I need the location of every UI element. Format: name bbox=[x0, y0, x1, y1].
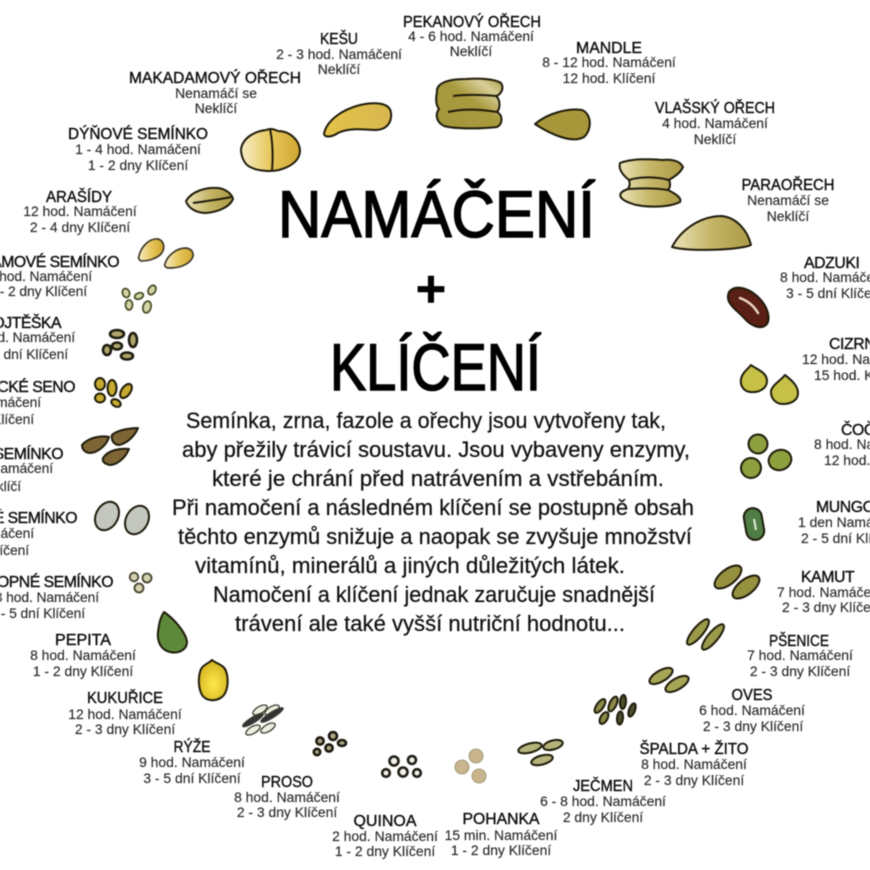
label: pepita: 1 - 2 dny Klíčení bbox=[33, 663, 133, 679]
label: kešu: KEŠU bbox=[320, 29, 358, 48]
label: špalda + žito: 8 hod. Namáčení bbox=[641, 756, 747, 772]
label: arašídy: 2 - 4 dny Klíčení bbox=[30, 219, 130, 235]
label: makadamový ořech: MAKADAMOVÝ OŘECH bbox=[129, 68, 301, 87]
label: kešu: 2 - 3 hod. Namáčení bbox=[276, 46, 402, 62]
icon: corn bbox=[199, 660, 228, 700]
icon: buckwheat bbox=[455, 749, 486, 783]
label: arašídy bbox=[23, 187, 137, 235]
label: ječmen: 2 dny Klíčení bbox=[563, 809, 643, 825]
label: kamut bbox=[777, 569, 870, 615]
label: oves: OVES bbox=[732, 687, 772, 704]
label: pepita bbox=[30, 632, 136, 679]
label: ječmen bbox=[540, 776, 666, 825]
label: ječmen: 6 - 8 hod. Namáčení bbox=[540, 793, 666, 809]
icon: sesame seeds bbox=[121, 284, 158, 314]
label: kukuřice bbox=[68, 688, 182, 737]
body text block bbox=[172, 408, 694, 636]
body text block: které je chrání před natrávením a vstřebáním. bbox=[212, 466, 664, 491]
label: dýňové semínko bbox=[68, 124, 208, 173]
label: rýže: RÝŽE bbox=[174, 737, 210, 756]
label: sezamové semínko bbox=[0, 252, 119, 299]
label: pepita: 8 hod. Namáčení bbox=[30, 647, 136, 663]
label: makadamový ořech: Nenamáčí se bbox=[175, 85, 257, 101]
icon: rice bbox=[241, 703, 285, 737]
label: rýže bbox=[139, 737, 245, 786]
body text block: těchto enzymů snižuje a naopak se zvyšuje množství bbox=[178, 524, 693, 549]
label: kukuřice: 12 hod. Namáčení bbox=[68, 706, 182, 722]
label: oves bbox=[699, 687, 805, 734]
icon: alfalfa bbox=[103, 330, 137, 360]
label: oves: 6 hod. Namáčení bbox=[699, 702, 805, 718]
icon: hemp seeds bbox=[130, 573, 152, 592]
label: pohanka bbox=[445, 811, 557, 858]
icon: peanuts bbox=[139, 239, 193, 268]
label: pšenice: 2 - 3 dny Klíčení bbox=[750, 663, 850, 679]
icon: walnut bbox=[620, 159, 683, 207]
label: paraořech: PARAOŘECH bbox=[742, 175, 834, 194]
label: mandle bbox=[542, 40, 676, 86]
label: kešu bbox=[276, 29, 402, 77]
label: quinoa: 1 - 2 dny Klíčení bbox=[335, 843, 435, 859]
icon: brazil nut bbox=[672, 216, 751, 250]
label: pšenice bbox=[747, 631, 853, 679]
label: arašídy: 12 hod. Namáčení bbox=[23, 203, 137, 219]
label: quinoa bbox=[332, 813, 438, 859]
icon: lentils bbox=[741, 434, 794, 478]
label: konopné semínko bbox=[0, 572, 113, 621]
body text block: Semínka, zrna, fazole a ořechy jsou vytvořeny tak, bbox=[186, 408, 666, 433]
label: makadamový ořech: Neklíčí bbox=[195, 100, 237, 116]
label: proso: 2 - 3 dny Klíčení bbox=[237, 804, 337, 820]
body text block: aby přežily trávicí soustavu. Jsou vybaveny enzymy, bbox=[182, 437, 690, 462]
icon: grey seeds bbox=[90, 498, 154, 538]
icon: pecan bbox=[436, 79, 502, 128]
label: paraořech: Neklíčí bbox=[767, 208, 809, 224]
icon: millet bbox=[314, 732, 346, 755]
icon: chickpeas bbox=[741, 365, 798, 404]
label: špalda + žito: ŠPALDA + ŽITO bbox=[640, 739, 748, 758]
label: mandle: MANDLE bbox=[576, 40, 642, 57]
label: slunečnicové semínko bbox=[0, 508, 77, 558]
label: oves: 2 - 3 dny Klíčení bbox=[703, 718, 803, 734]
label: cizrna bbox=[802, 336, 870, 383]
icon: mung bean bbox=[742, 507, 766, 541]
label: rýže: 9 hod. Namáčení bbox=[139, 754, 245, 770]
label: quinoa: QUINOA bbox=[354, 813, 417, 830]
body text block: trávení ale také vyšší nutriční hodnotu... bbox=[235, 611, 625, 636]
icon: fenugreek bbox=[95, 378, 134, 409]
label: quinoa: 2 hod. Namáčení bbox=[332, 828, 438, 844]
icon: oats bbox=[647, 665, 691, 695]
label: čočka bbox=[814, 420, 870, 468]
label: špalda + žito: 2 - 3 dny Klíčení bbox=[644, 772, 744, 788]
title: Klíčení: KLÍČENÍ bbox=[330, 330, 542, 404]
label: pšenice: PŠENICE bbox=[769, 631, 829, 650]
label: proso bbox=[234, 774, 340, 820]
icon: kamut bbox=[711, 561, 763, 603]
label: paraořech bbox=[742, 175, 834, 224]
label: dýňové semínko: DÝŇOVÉ SEMÍNKO bbox=[68, 124, 208, 143]
label: vlašský ořech: VLAŠSKÝ OŘECH bbox=[655, 98, 775, 117]
label: dýňové semínko: 1 - 4 hod. Namáčení bbox=[75, 141, 201, 157]
label: mandle: 12 hod. Klíčení bbox=[563, 70, 655, 86]
label: pekanový ořech: 4 - 6 hod. Namáčení bbox=[408, 28, 534, 44]
label: pekanový ořech: Neklíčí bbox=[450, 43, 492, 59]
label: řecké seno bbox=[0, 377, 75, 427]
body text block: vitamínů, minerálů a jiných důležitých látek. bbox=[195, 553, 625, 578]
label: pšenice: 7 hod. Namáčení bbox=[747, 647, 853, 663]
label: pekanový ořech bbox=[403, 12, 541, 59]
label: dýňové semínko: 1 - 2 dny Klíčení bbox=[88, 157, 188, 173]
label: paraořech: Nenamáčí se bbox=[747, 192, 829, 208]
label: kukuřice: KUKUŘICE bbox=[87, 688, 163, 707]
icon: adzuki bbox=[728, 288, 769, 327]
label: vlašský ořech: Neklíčí bbox=[694, 131, 736, 147]
body text block: Namočení a klíčení jednak zaručuje snadnější bbox=[213, 582, 656, 607]
icon: barley bbox=[517, 738, 564, 767]
label: rýže: 3 - 5 dní Klíčení bbox=[143, 770, 241, 786]
icon: pumpkin seed kernel bbox=[186, 188, 233, 213]
plus sign: + bbox=[416, 261, 446, 317]
icon: cashew bbox=[324, 103, 391, 137]
icon: wheat bbox=[684, 617, 727, 652]
label: vojtěška bbox=[0, 313, 75, 362]
label: makadamový ořech bbox=[129, 68, 301, 116]
label: lněné semínko bbox=[0, 444, 63, 494]
label: pohanka: POHANKA bbox=[462, 811, 540, 828]
icon: almond bbox=[535, 110, 590, 139]
label: ječmen: JEČMEN bbox=[573, 776, 633, 795]
label: arašídy: ARAŠÍDY bbox=[46, 187, 112, 206]
icon: quinoa bbox=[382, 756, 421, 777]
label: proso: PROSO bbox=[261, 774, 313, 791]
label: kukuřice: 2 - 3 dny Klíčení bbox=[75, 721, 175, 737]
label: kešu: Neklíčí bbox=[318, 61, 360, 77]
label: pepita: PEPITA bbox=[55, 632, 111, 649]
label: adzuki: ADZUKI bbox=[804, 255, 860, 272]
icon: macadamia bbox=[241, 129, 300, 171]
label: pekanový ořech: PEKANOVÝ OŘECH bbox=[403, 12, 541, 31]
label: mungo bbox=[798, 499, 870, 546]
label: proso: 8 hod. Namáčení bbox=[234, 789, 340, 805]
body text block: Při namočení a následném klíčení se postupně obsah bbox=[172, 495, 694, 520]
label: pohanka: 1 - 2 dny Klíčení bbox=[451, 842, 551, 858]
label: špalda + žito bbox=[640, 739, 748, 788]
label: vlašský ořech: 4 hod. Namáčení bbox=[662, 115, 768, 131]
icon: spelt and rye bbox=[593, 695, 637, 725]
icon: pepita bbox=[158, 612, 187, 653]
label: mandle: 8 - 12 hod. Namáčení bbox=[542, 54, 676, 70]
label: pohanka: 15 min. Namáčení bbox=[445, 827, 557, 843]
icon: brown seeds bbox=[82, 428, 138, 465]
label: vlašský ořech bbox=[655, 98, 775, 147]
label: kamut: KAMUT bbox=[801, 569, 855, 586]
label: adzuki bbox=[780, 255, 870, 301]
title: Namáčení: NAMÁČENÍ bbox=[278, 177, 596, 251]
